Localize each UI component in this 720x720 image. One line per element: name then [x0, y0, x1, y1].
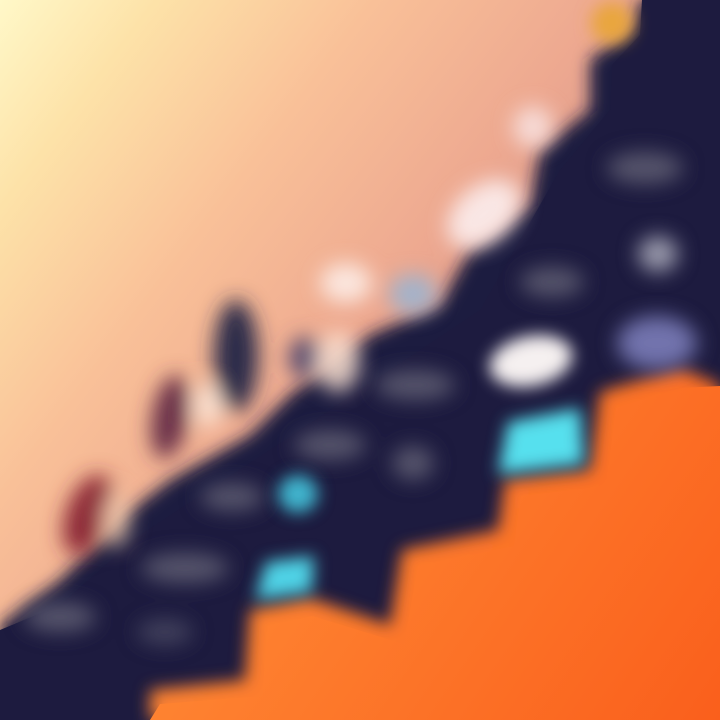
dark stair labels	[24, 152, 683, 645]
floating shapes along the diagonal	[320, 106, 553, 314]
sun icon	[591, 2, 633, 44]
climbing figures	[53, 300, 360, 562]
orange staircase	[150, 368, 720, 720]
white card	[485, 328, 577, 394]
lavender block	[617, 316, 697, 370]
cyan highlights	[255, 408, 584, 600]
